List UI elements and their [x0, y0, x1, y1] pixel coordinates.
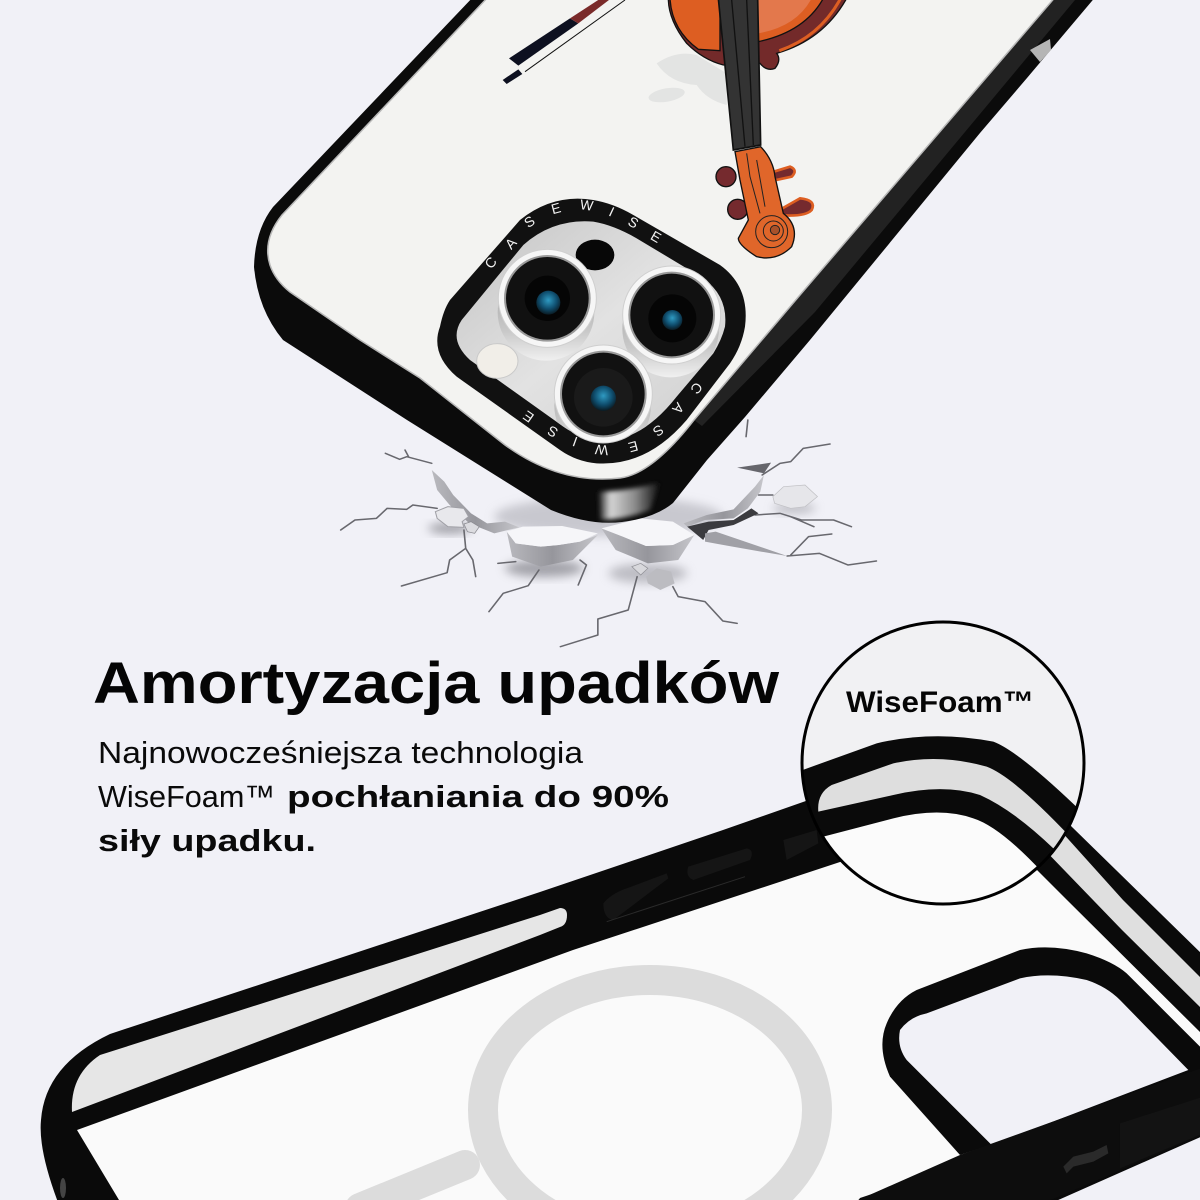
lens 1 — [498, 249, 596, 347]
camera opening — [457, 221, 725, 440]
body text: WiseFoam™ — [98, 779, 275, 814]
bottom phone case — [41, 765, 1200, 1200]
violin neck — [718, 0, 761, 150]
camera ring — [437, 199, 746, 464]
camera cutout — [857, 947, 1200, 1200]
magnetic pill — [360, 1165, 465, 1200]
glossy highlight on corner — [598, 482, 660, 520]
ring lettering bottom: S — [650, 422, 667, 440]
side streaks — [1120, 1097, 1200, 1168]
clear window — [77, 830, 1200, 1200]
ring lettering top: E — [648, 227, 664, 246]
ring lettering bottom: S — [545, 422, 561, 441]
top phone case — [254, 0, 1097, 523]
side button highlight — [1030, 39, 1051, 62]
microphone hole — [576, 240, 614, 270]
background corner — [1047, 1135, 1200, 1200]
ring lettering bottom: W — [594, 441, 609, 459]
lens 3 — [554, 345, 652, 443]
foam strip right — [1038, 830, 1200, 1012]
side band — [694, 0, 1075, 426]
violin artwork — [503, 0, 847, 258]
side port — [1063, 1145, 1108, 1173]
ring lettering top: C — [481, 254, 500, 272]
flash — [477, 344, 518, 378]
foam strip left — [72, 908, 567, 1112]
magnified bumper — [804, 736, 1076, 902]
ring lettering bottom — [520, 379, 706, 459]
side buttons — [603, 830, 818, 922]
body text: siły upadku. — [98, 823, 316, 858]
lower side bumper — [857, 1067, 1200, 1200]
lens 2 — [623, 266, 721, 364]
magnetic ring — [483, 980, 817, 1200]
ring lettering top: A — [502, 234, 520, 252]
ring lettering bottom: E — [627, 438, 640, 456]
heading: Amortyzacja upadków — [93, 651, 780, 716]
bow — [503, 0, 625, 84]
WiseFoam magnifier callout — [793, 622, 1087, 910]
ring lettering top — [481, 196, 664, 272]
case bumper — [254, 0, 1097, 523]
ring lettering top: I — [607, 204, 617, 220]
shadow — [657, 54, 727, 105]
case frame — [41, 765, 1200, 1200]
ring lettering bottom: E — [520, 408, 537, 426]
violin scroll — [716, 147, 813, 258]
ring lettering bottom: C — [687, 379, 706, 397]
ring lettering bottom: I — [570, 434, 580, 450]
ring lettering top: S — [521, 212, 538, 231]
camera module — [437, 196, 746, 464]
violin body — [668, 0, 847, 69]
body text: Najnowocześniejsza technologia — [98, 735, 584, 770]
lens housings — [498, 305, 719, 435]
ring lettering top: W — [579, 196, 595, 214]
small port left — [60, 1178, 66, 1198]
ring lettering top: E — [549, 199, 563, 217]
back panel — [268, 0, 1057, 479]
ring lettering top: S — [625, 213, 641, 232]
body text — [98, 735, 669, 858]
ring lettering bottom: A — [669, 400, 688, 418]
body text: pochłaniania do 90% — [287, 779, 669, 814]
callout label: WiseFoam™ — [846, 686, 1034, 719]
cracked ground illustration — [341, 420, 876, 647]
